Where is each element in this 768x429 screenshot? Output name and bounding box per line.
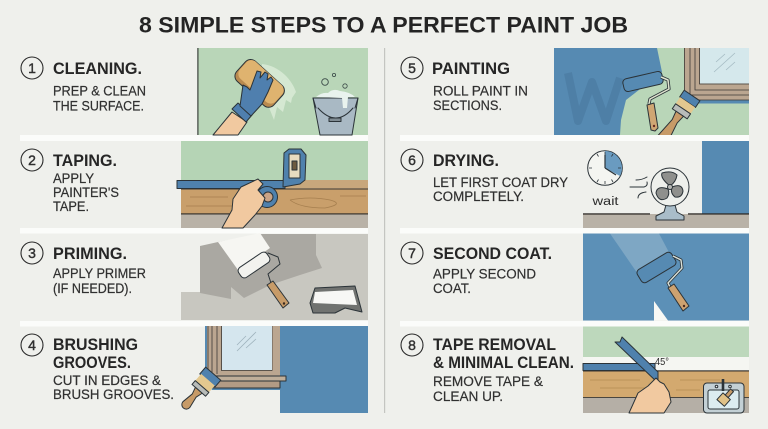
step 1: cleaning [21, 48, 368, 135]
heading: brushing grooves [53, 335, 138, 372]
heading: brushing grooves: GROOVES. [53, 353, 131, 372]
description: second coat [433, 266, 536, 296]
illustration: window and brush [176, 326, 368, 415]
description: cleaning: THE SURFACE. [53, 98, 144, 114]
description: drying [433, 175, 568, 204]
label: wait: wait [591, 196, 620, 208]
step 7: second coat [401, 234, 749, 320]
illustration: applying tape [177, 141, 368, 228]
illustration: clock, fan and wall [583, 141, 749, 228]
description: painting [433, 84, 528, 113]
step 3: priming [21, 233, 368, 320]
heading: second coat: SECOND COAT. [433, 244, 552, 263]
description: cleaning [53, 84, 146, 114]
description: tape removal: CLEAN UP. [433, 389, 503, 404]
illustration: priming wall [181, 233, 368, 320]
number badge 3 [21, 242, 43, 264]
description: tape removal: REMOVE TAPE & [433, 374, 543, 389]
description: taping: TAPE. [53, 199, 89, 214]
number badge 2: 2 [28, 152, 36, 168]
number badge 4 [21, 334, 43, 356]
number badge 3: 3 [28, 245, 36, 261]
number badge 7: 7 [408, 245, 416, 261]
heading: painting: PAINTING [432, 59, 510, 78]
step 5: painting [401, 48, 749, 145]
icon: airflow lines [630, 177, 647, 198]
number badge 5 [401, 57, 423, 79]
description: brushing grooves: CUT IN EDGES & [53, 373, 161, 388]
heading: priming: PRIMING. [53, 244, 127, 263]
description: second coat: APPLY SECOND [433, 266, 536, 282]
description: tape removal [433, 374, 543, 404]
step 2: taping [21, 141, 368, 228]
title: 8 SIMPLE STEPS TO A PERFECT PAINT JOB [139, 12, 628, 38]
description: priming: (IF NEEDED). [53, 281, 132, 296]
description: priming [53, 266, 146, 296]
description: painting: SECTIONS. [433, 98, 502, 113]
number badge 6 [401, 149, 423, 171]
number badge 4: 4 [28, 337, 36, 353]
step 6: drying [401, 141, 749, 228]
number badge 8: 8 [408, 337, 416, 353]
description: brushing grooves [53, 373, 174, 402]
number badge 6: 6 [408, 152, 416, 168]
icon: clock [588, 151, 622, 185]
heading: drying: DRYING. [433, 151, 499, 170]
illustration: sponge and bucket [197, 48, 368, 135]
number badge 8 [401, 334, 423, 356]
illustration: tape removal and sink [583, 326, 749, 413]
number badge 1: 1 [28, 60, 36, 76]
description: second coat: COAT. [433, 281, 471, 296]
heading: tape removal: TAPE REMOVAL [433, 335, 556, 354]
heading: tape removal [433, 335, 574, 372]
description: brushing grooves: BRUSH GROOVES. [53, 387, 174, 402]
description: taping: APPLY [53, 171, 94, 186]
number badge 2 [21, 149, 43, 171]
heading: taping: TAPING. [53, 151, 117, 170]
number badge 1 [21, 57, 43, 79]
illustration: roller and brush [554, 48, 749, 135]
heading: tape removal: & MINIMAL CLEAN. [433, 353, 574, 372]
description: cleaning: PREP & CLEAN [53, 84, 146, 98]
description: taping [53, 171, 119, 214]
step 4: brushing grooves [21, 326, 368, 415]
description: painting: ROLL PAINT IN [433, 84, 528, 98]
description: taping: PAINTER'S [53, 185, 119, 200]
illustration: second coat roller [583, 234, 749, 320]
heading: brushing grooves: BRUSHING [53, 335, 138, 354]
label: 45 degrees: 45° [655, 356, 669, 368]
description: drying: COMPLETELY. [433, 189, 524, 204]
description: priming: APPLY PRIMER [53, 266, 146, 281]
icon: fan [651, 168, 689, 220]
icon: sink with brush [704, 379, 744, 413]
step 8: tape removal [401, 326, 749, 413]
description: drying: LET FIRST COAT DRY [433, 175, 568, 190]
heading: cleaning: CLEANING. [53, 59, 142, 78]
number badge 7 [401, 242, 423, 264]
number badge 5: 5 [408, 60, 416, 76]
